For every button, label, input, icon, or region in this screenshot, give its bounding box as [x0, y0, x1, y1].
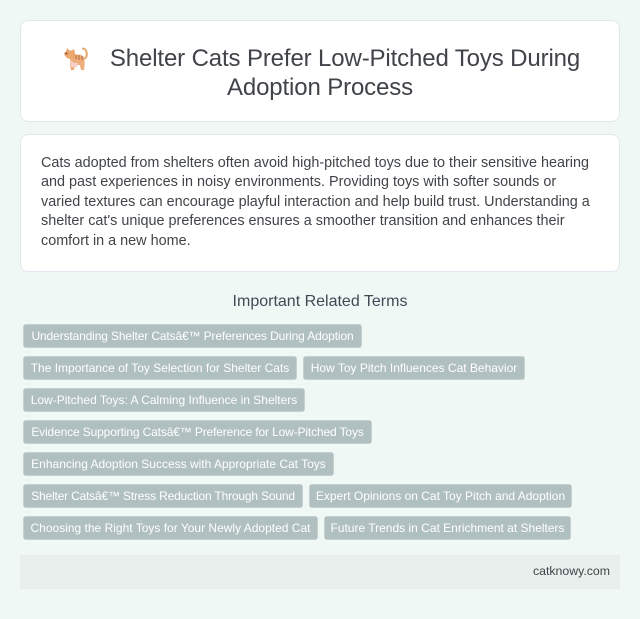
tag [23, 388, 305, 412]
tag [303, 356, 525, 380]
text block: description: varied textures can encourage playful interaction and help build trust. Understanding a [41, 194, 590, 210]
tag: Enhancing Adoption Success with Appropriate Cat Toys [31, 457, 326, 471]
text block: description: and past experiences in noisy environments. Providing toys with softer sounds or [41, 174, 556, 190]
tag [23, 356, 297, 380]
text block: description: comfort in a new home. [41, 233, 191, 249]
footer text: catknowy.com [533, 564, 610, 578]
text block: description: Cats adopted from shelters often avoid high-pitched toys due to their sensitive hearing [41, 155, 589, 171]
tag: The Importance of Toy Selection for Shelter Cats [31, 361, 289, 375]
title: Shelter Cats Prefer Low-Pitched Toys During [110, 45, 580, 72]
tag: Low-Pitched Toys: A Calming Influence in Shelters [31, 393, 297, 407]
tag: Evidence Supporting Catsâ€™ Preference for Low-Pitched Toys [31, 425, 364, 439]
tag [324, 516, 571, 540]
tag: Understanding Shelter Catsâ€™ Preferences During Adoption [31, 329, 354, 343]
tag [23, 484, 303, 508]
tag list [23, 324, 572, 540]
heading: related terms: Important Related Terms [233, 293, 407, 310]
title: Adoption Process [227, 74, 413, 101]
panel: title card [20, 20, 620, 122]
tag: How Toy Pitch Influences Cat Behavior [311, 361, 517, 375]
tag: Expert Opinions on Cat Toy Pitch and Adoption [316, 489, 565, 503]
tag [309, 484, 572, 508]
title [110, 45, 580, 101]
tag: Future Trends in Cat Enrichment at Shelters [330, 521, 565, 535]
tag: Shelter Catsâ€™ Stress Reduction Through Sound [31, 489, 295, 503]
text block: description: shelter cat's unique preferences ensures a smoother transition and enhances their [41, 213, 565, 229]
tag [23, 324, 362, 348]
text block: description [41, 155, 590, 249]
tag: Choosing the Right Toys for Your Newly Adopted Cat [31, 521, 310, 535]
icon: cat [64, 48, 88, 70]
panel: description card [20, 134, 620, 272]
tag [23, 420, 372, 444]
tag [23, 516, 318, 540]
footer bar [20, 555, 620, 589]
tag [23, 452, 334, 476]
